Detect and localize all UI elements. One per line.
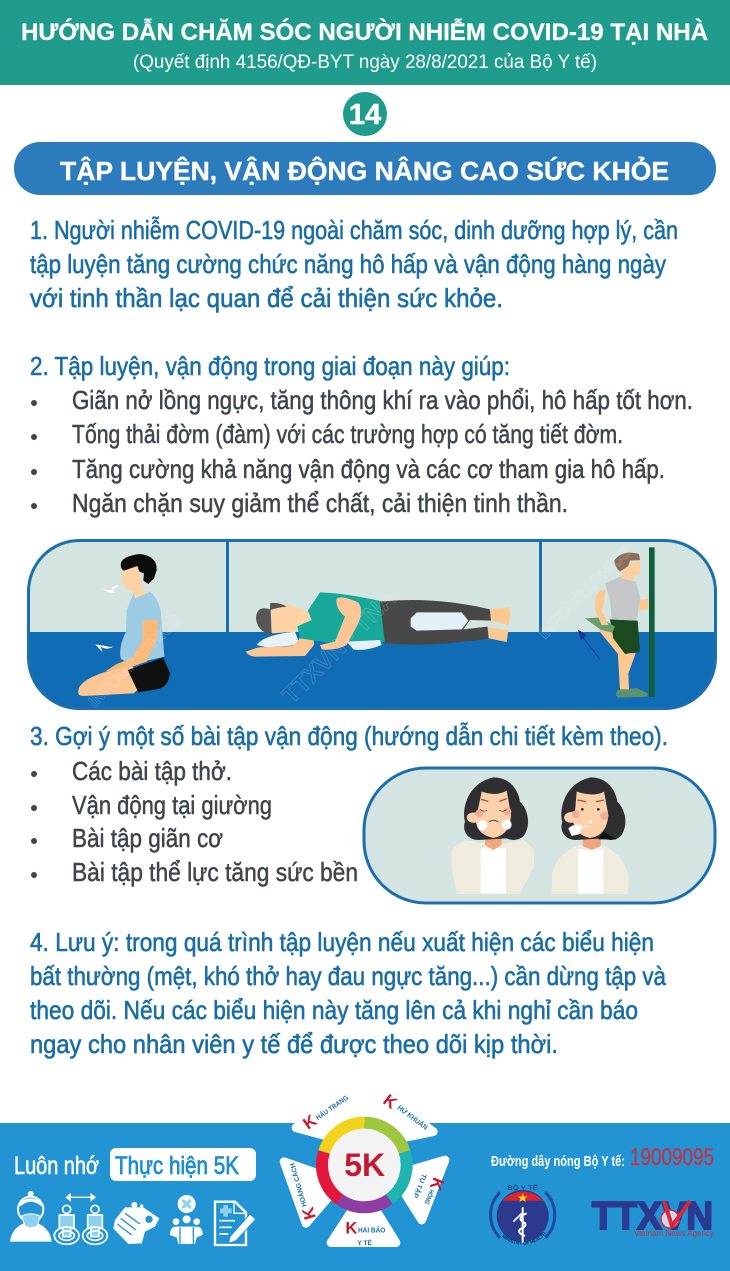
header band [0,0,730,85]
figure: woman puffed cheeks [452,777,534,894]
paragraph 2 with bullets: 2. Tập luyện, vận động trong giai đoạn này giúp: [30,351,510,381]
petal: khai bao y te: HAI BÁO [358,1225,386,1234]
logo: ministry of health: BỘ Y TẾ [507,1182,538,1192]
icon: medical form and pencil [215,1202,256,1245]
petal: khong tu tap: HÔNG [422,1188,436,1206]
petal: khong tu tap: TỤ TẬP [411,1173,429,1200]
logo: TTXVN: TTXVN [592,1195,713,1238]
logo: ministry of health [489,1182,556,1245]
footer reminder [14,1148,256,1181]
hotline: Đường dây nóng Bộ Y tế: [491,1153,625,1170]
petal: khoang cach [284,1162,342,1223]
paragraph 2 with bullets [30,351,693,518]
petal: khau trang [296,1089,353,1143]
paragraph 3 with bullets: Vận động tại giường [72,790,272,820]
petal: khai bao y te: K [345,1218,357,1237]
petal: khu khuan: HỬ KHUẨN [396,1103,430,1132]
header subtitle: (Quyết định 4156/QĐ-BYT ngày 28/8/2021 của Bộ Y tế) [133,52,597,73]
panel: exercise illustrations [28,540,716,711]
colour ring [322,1123,407,1207]
watermarks: INFOGRAPHICS [86,612,185,711]
footer reminder: Thực hiện 5K [115,1152,239,1180]
icon: handwashing [113,1202,159,1244]
icon: distancing [54,1195,107,1244]
petal: khai bao y te: Y TẾ [357,1237,373,1247]
header title: HƯỚNG DẪN CHĂM SÓC NGƯỜI NHIỄM COVID-19 TẠI NHÀ [21,17,708,46]
petal: khong tu tap: K [426,1175,448,1193]
5K label: 5K [344,1147,385,1183]
figure: woman exhaling [552,777,628,894]
5K icons row [10,1191,256,1245]
icon: woman with mask [10,1191,52,1242]
paragraph 4 note: 4. Lưu ý: trong quá trình tập luyện nếu xuất hiện các biểu hiện [30,927,654,957]
petal: khong tu tap [393,1160,448,1220]
paragraph 1: với tinh thần lạc quan để cải thiện sức khỏe. [30,283,503,313]
icon: group with cross [170,1195,203,1244]
logo: TTXVN: Vietnam News Agency [634,1229,714,1238]
number badge 14: 14 [349,99,381,131]
petal: khu khuan [377,1090,433,1143]
paragraph 4 note: theo dõi. Nếu các biểu hiện này tăng lên cả khi nghỉ cần báo [30,995,638,1025]
paragraph 4 note [30,927,666,1059]
figure: lying on side [246,592,510,657]
hotline [491,1144,714,1171]
paragraph 3 with bullets: Các bài tập thở. [72,756,232,786]
paragraph 3 with bullets [30,721,668,887]
petal: khoang cach: K [298,1205,320,1222]
section heading banner: TẬP LUYỆN, VẬN ĐỘNG NÂNG CAO SỨC KHỎE [60,155,669,186]
5K diagram [284,1089,448,1247]
section heading banner [14,142,716,195]
paragraph 2 with bullets: Tống thải đờm (đàm) với các trường hợp có tăng tiết đờm. [72,419,623,449]
logo: ministry of health: MINISTRY OF HEALTH [502,1232,546,1245]
petal: khau trang: HẨU TRANG [314,1093,350,1122]
figure: seated breathing [78,554,170,696]
number badge 14 [343,92,387,136]
watermarks [86,544,635,711]
paragraph 3 with bullets: Bài tập thể lực tăng sức bền [72,857,358,887]
paragraph 2 with bullets: Ngăn chặn suy giảm thể chất, cải thiện tinh thần. [72,488,568,518]
panel: breathing women illustration [364,768,715,903]
footer band [0,1123,730,1271]
petal: khoang cach: HOẢNG CÁCH [287,1162,309,1208]
figure: standing quad stretch [578,547,655,698]
watermarks: INFOGRAPHICS [536,544,635,643]
paragraph 3 with bullets: Bài tập giãn cơ [72,823,223,853]
watermarks: TTXVN - TNA [277,585,402,709]
paragraph 1 [30,215,678,313]
petal: khu khuan: K [380,1090,401,1113]
petal: khai bao y te [331,1192,396,1247]
petal: khau trang: K [299,1111,320,1133]
paragraph 4 note: ngay cho nhân viên y tế để được theo dõi kịp thời. [30,1029,558,1059]
footer reminder: Luôn nhớ [14,1152,99,1180]
